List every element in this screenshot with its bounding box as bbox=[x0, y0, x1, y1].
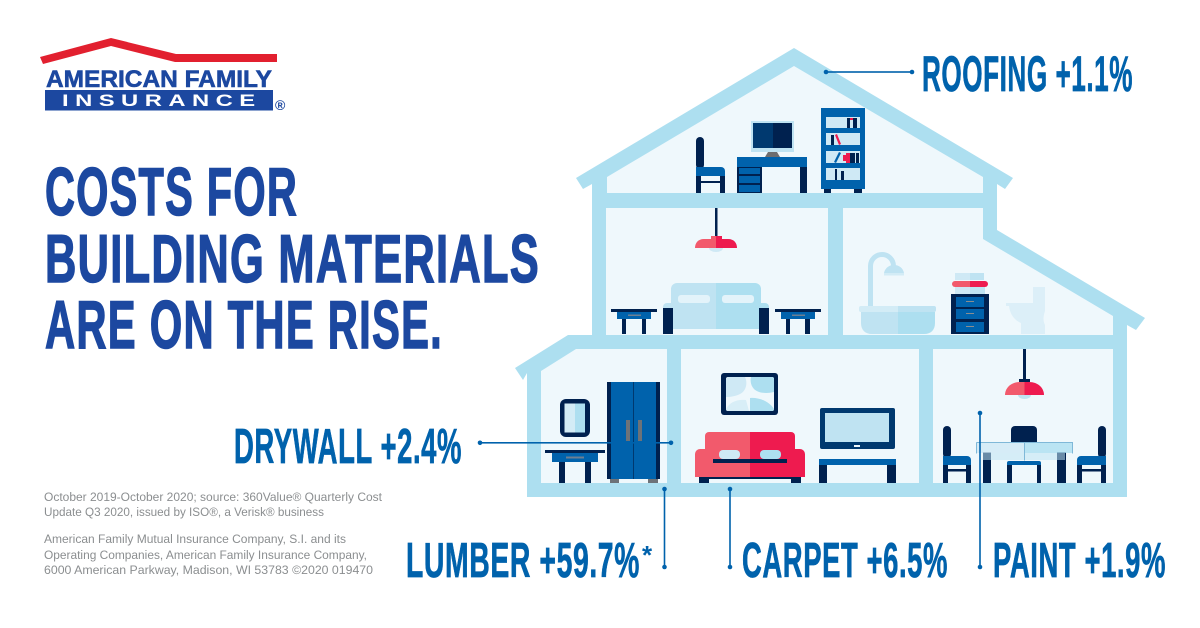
label: lumber bbox=[406, 487, 667, 588]
dresser with towels bbox=[951, 273, 989, 334]
lumber asterisk: * bbox=[642, 540, 653, 570]
room interiors bbox=[541, 66, 1113, 483]
carpet leader line bbox=[728, 487, 732, 569]
label: carpet bbox=[728, 487, 948, 588]
desk bbox=[737, 157, 807, 193]
dining table with cloth bbox=[976, 442, 1073, 483]
office chair bbox=[696, 137, 725, 193]
living room furniture bbox=[695, 373, 896, 483]
label: drywall: DRYWALL +2.4% bbox=[234, 420, 462, 474]
left dining chair bbox=[943, 426, 971, 483]
source footnote: October 2019-October 2020; source: 360Value® Quarterly Cost bbox=[44, 490, 383, 504]
right dining chair bbox=[1077, 426, 1106, 483]
title: BUILDING MATERIALS bbox=[45, 221, 540, 297]
bathtub and shower bbox=[859, 255, 936, 334]
bedroom furniture bbox=[611, 208, 821, 334]
logo insurance text: INSURANCE bbox=[62, 91, 255, 110]
hallway furniture bbox=[545, 382, 660, 483]
centre dining chair bbox=[1007, 426, 1041, 483]
attic office furniture bbox=[696, 108, 865, 193]
company legal text: 6000 American Parkway, Madison, WI 53783 ©2020 019470 bbox=[44, 563, 373, 577]
company legal text: American Family Mutual Insurance Company, S.I. and its bbox=[44, 532, 346, 546]
computer monitor bbox=[751, 121, 794, 157]
bedroom lamp bbox=[695, 208, 737, 252]
bookcase bbox=[821, 108, 865, 193]
logo blue bar bbox=[45, 90, 273, 110]
dining lamp bbox=[1005, 349, 1044, 399]
registered mark: ® bbox=[275, 97, 286, 113]
right nightstand bbox=[775, 309, 821, 334]
dining room furniture bbox=[943, 349, 1106, 483]
hall table bbox=[545, 450, 605, 483]
house cross-section bbox=[515, 48, 1145, 497]
wardrobe bbox=[607, 382, 660, 483]
company legal text bbox=[44, 532, 373, 577]
label: roofing bbox=[824, 46, 1133, 102]
red sofa bbox=[695, 432, 805, 483]
left nightstand bbox=[611, 309, 657, 334]
bathroom fixtures bbox=[859, 255, 1045, 334]
paint leader line bbox=[978, 411, 982, 569]
framed picture bbox=[721, 373, 778, 415]
lumber leader line bbox=[662, 487, 667, 569]
house walls and roof bbox=[515, 48, 1145, 497]
logo red roof bbox=[40, 38, 277, 64]
title: COSTS FOR bbox=[45, 154, 298, 230]
source footnote: Update Q3 2020, issued by ISO®, a Verisk® business bbox=[44, 505, 324, 519]
drywall leader line bbox=[478, 440, 673, 445]
title: ARE ON THE RISE. bbox=[45, 287, 443, 363]
television bbox=[820, 408, 895, 449]
roofing leader line bbox=[824, 70, 914, 74]
tv stand bbox=[819, 459, 896, 483]
label: lumber: LUMBER +59.7% bbox=[406, 534, 640, 588]
label: paint bbox=[978, 411, 1166, 588]
source footnote bbox=[44, 490, 383, 519]
bed bbox=[663, 283, 769, 334]
logo: American Family Insurance bbox=[40, 38, 286, 113]
company legal text: Operating Companies, American Family Insurance Company, bbox=[44, 548, 367, 562]
title bbox=[45, 154, 540, 363]
logo wordmark: AMERICAN FAMILY bbox=[46, 66, 272, 93]
toilet bbox=[1006, 287, 1045, 334]
label: carpet: CARPET +6.5% bbox=[742, 534, 948, 588]
hall mirror bbox=[560, 399, 590, 437]
